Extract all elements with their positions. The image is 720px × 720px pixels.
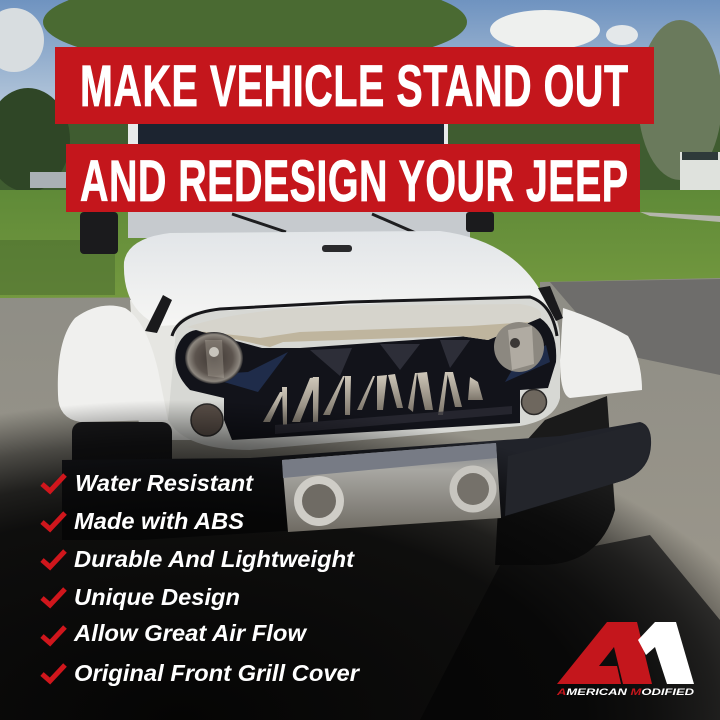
grille teeth [263,372,483,425]
left fender [58,306,168,422]
wheels [72,422,172,482]
logo: American Modified: A MERICAN M ODIFIED [556,687,694,698]
windshield frame [128,124,448,214]
grille opening [175,304,556,440]
body behind grille [168,296,560,450]
hood latches [145,295,172,333]
right fender [560,308,642,398]
item: durable and lightweight: Durable And Lightweight [74,546,355,572]
body side [130,250,556,440]
item: made with ABS: Made with ABS [74,508,244,534]
title banner line 2: AND REDESIGN YOUR JEEP [80,148,628,214]
hood [124,231,544,326]
item: unique design: Unique Design [74,584,240,610]
bumper [62,422,651,540]
feature checklist [42,470,361,686]
grille top visor [187,304,541,347]
item: water resistant: Water Resistant [75,470,254,496]
item: original front grill cover: Original Front Grill Cover [74,660,361,686]
bottom dark gradient overlay [0,380,720,720]
jeep vehicle [58,124,651,565]
item: allow great air flow: Allow Great Air Flow [73,620,308,646]
bumper plate and fog lights [282,424,650,532]
black hood seam [172,297,557,336]
logo: American Modified [556,622,694,698]
title banner line 1: MAKE VEHICLE STAND OUT [80,53,628,119]
turn signals [191,390,546,436]
headlights [185,332,243,384]
